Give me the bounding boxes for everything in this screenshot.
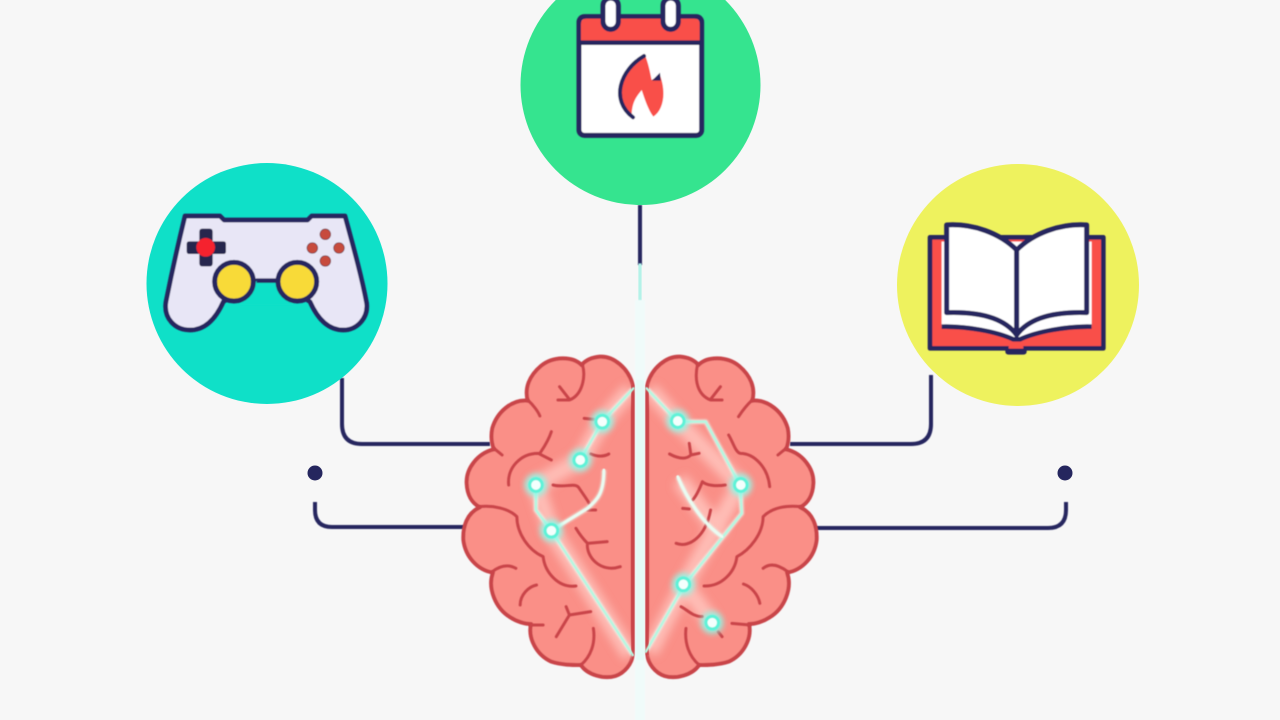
brain xyxy=(463,263,817,720)
icon: open book xyxy=(930,225,1103,355)
right page xyxy=(1017,225,1087,335)
flame xyxy=(621,55,663,117)
left thumbstick xyxy=(215,262,253,301)
brain hemispheres fill xyxy=(463,357,817,677)
connector: lower left xyxy=(315,502,464,527)
circle: game controller background xyxy=(146,163,388,404)
circle: book background xyxy=(897,164,1139,406)
icon: calendar with flame xyxy=(579,0,702,135)
brain folds right xyxy=(670,365,801,665)
circuit nodes xyxy=(525,410,752,634)
left page xyxy=(947,225,1017,335)
circuit lines xyxy=(536,388,742,655)
central glow beam xyxy=(635,263,645,720)
dot: left xyxy=(308,466,322,480)
soft light around circuit xyxy=(536,390,740,655)
right thumbstick xyxy=(278,262,317,301)
d-pad xyxy=(187,229,226,266)
brain folds left xyxy=(479,365,620,665)
action buttons xyxy=(307,229,344,266)
infographic: brain connected to activities xyxy=(146,0,1139,680)
icon: game controller xyxy=(166,216,367,330)
connector: controller to brain xyxy=(342,378,490,444)
dot: right xyxy=(1058,466,1072,480)
connector: lower right xyxy=(816,502,1066,528)
connector: calendar to brain xyxy=(638,205,642,265)
calendar rings xyxy=(603,0,618,29)
brain midline strokes xyxy=(633,385,647,655)
connector lines xyxy=(315,205,1066,528)
circle: calendar background xyxy=(520,0,760,205)
d-pad red centre xyxy=(196,238,215,257)
circuit glow xyxy=(536,388,742,655)
connector: book to brain xyxy=(790,375,931,444)
